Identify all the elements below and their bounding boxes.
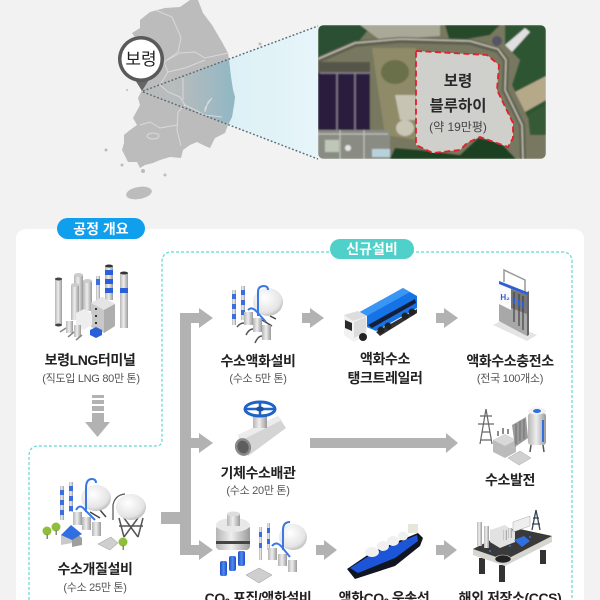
label: liquid hydrogen station: (전국 100개소)	[477, 372, 543, 385]
label: liquid hydrogen tank trailer: 액화수소	[360, 351, 410, 367]
satellite photo of the site	[318, 25, 546, 159]
label: LNG terminal: (직도입 LNG 80만 톤)	[42, 372, 140, 385]
arrow: down	[85, 395, 110, 437]
label: liquid hydrogen station: 액화수소충전소	[466, 353, 554, 369]
satellite photo of the site: (약 19만평)	[429, 119, 487, 134]
heading: process overview: 공정 개요	[73, 221, 129, 237]
icon: hydrogen liquefaction facility	[232, 286, 283, 343]
icon: offshore storage platform	[473, 510, 552, 582]
arrow: long	[310, 433, 458, 453]
icon: liquid CO2 carrier	[347, 524, 423, 579]
process overview card	[16, 229, 584, 600]
icon: LNG terminal	[55, 264, 128, 340]
arrow	[316, 540, 337, 560]
icon: CO2 capture and liquefaction	[216, 512, 307, 583]
heading: new facilities: 신규설비	[346, 241, 398, 257]
projection wedge from Boryeong to site photo	[143, 26, 318, 159]
icon: hydrogen fuelling station: H₂	[500, 293, 510, 302]
label: gas hydrogen pipeline: (수소 20만 톤)	[226, 484, 290, 497]
location pin: Boryeong	[118, 36, 164, 91]
icon: gas pipe with valve	[232, 402, 286, 458]
label: hydrogen power: 수소발전	[485, 472, 535, 488]
dotted projection lines	[143, 26, 318, 159]
heading: process overview	[57, 218, 145, 239]
label: hydrogen reforming: 수소개질설비	[58, 561, 132, 577]
dashed outline: new facilities	[29, 252, 572, 600]
label: liquid hydrogen tank trailer: 탱크트레일러	[348, 370, 422, 386]
map of Korea	[104, 0, 262, 200]
label: hydrogen reforming: (수소 25만 톤)	[63, 581, 127, 594]
arrow	[436, 540, 457, 560]
label: hydrogen liquefaction: (수소 5만 톤)	[229, 372, 287, 385]
label: liquid hydrogen tank trailer	[348, 351, 422, 386]
icon: tank trailer	[344, 288, 417, 342]
heading: new facilities	[330, 239, 414, 259]
site boundary	[416, 51, 513, 153]
label: gas hydrogen pipeline	[221, 465, 296, 497]
icon: hydrogen reforming facility	[42, 479, 146, 550]
label: LNG terminal	[42, 352, 140, 385]
label: LNG terminal: 보령LNG터미널	[45, 352, 135, 368]
arrow	[436, 308, 458, 328]
label: hydrogen liquefaction	[221, 353, 295, 385]
label: gas hydrogen pipeline: 기체수소배관	[221, 465, 296, 481]
label: hydrogen liquefaction: 수소액화설비	[221, 353, 295, 369]
arrow: branching trunk	[161, 308, 213, 560]
label: hydrogen reforming	[58, 561, 132, 594]
arrow	[302, 308, 324, 328]
location pin: Boryeong: 보령	[125, 50, 157, 69]
satellite photo of the site: 보령	[444, 72, 472, 90]
icon: hydrogen power generation	[478, 408, 546, 465]
satellite photo of the site: 블루하이	[429, 97, 487, 115]
icon: hydrogen fuelling station	[493, 270, 537, 341]
label: liquid hydrogen station	[466, 353, 554, 385]
